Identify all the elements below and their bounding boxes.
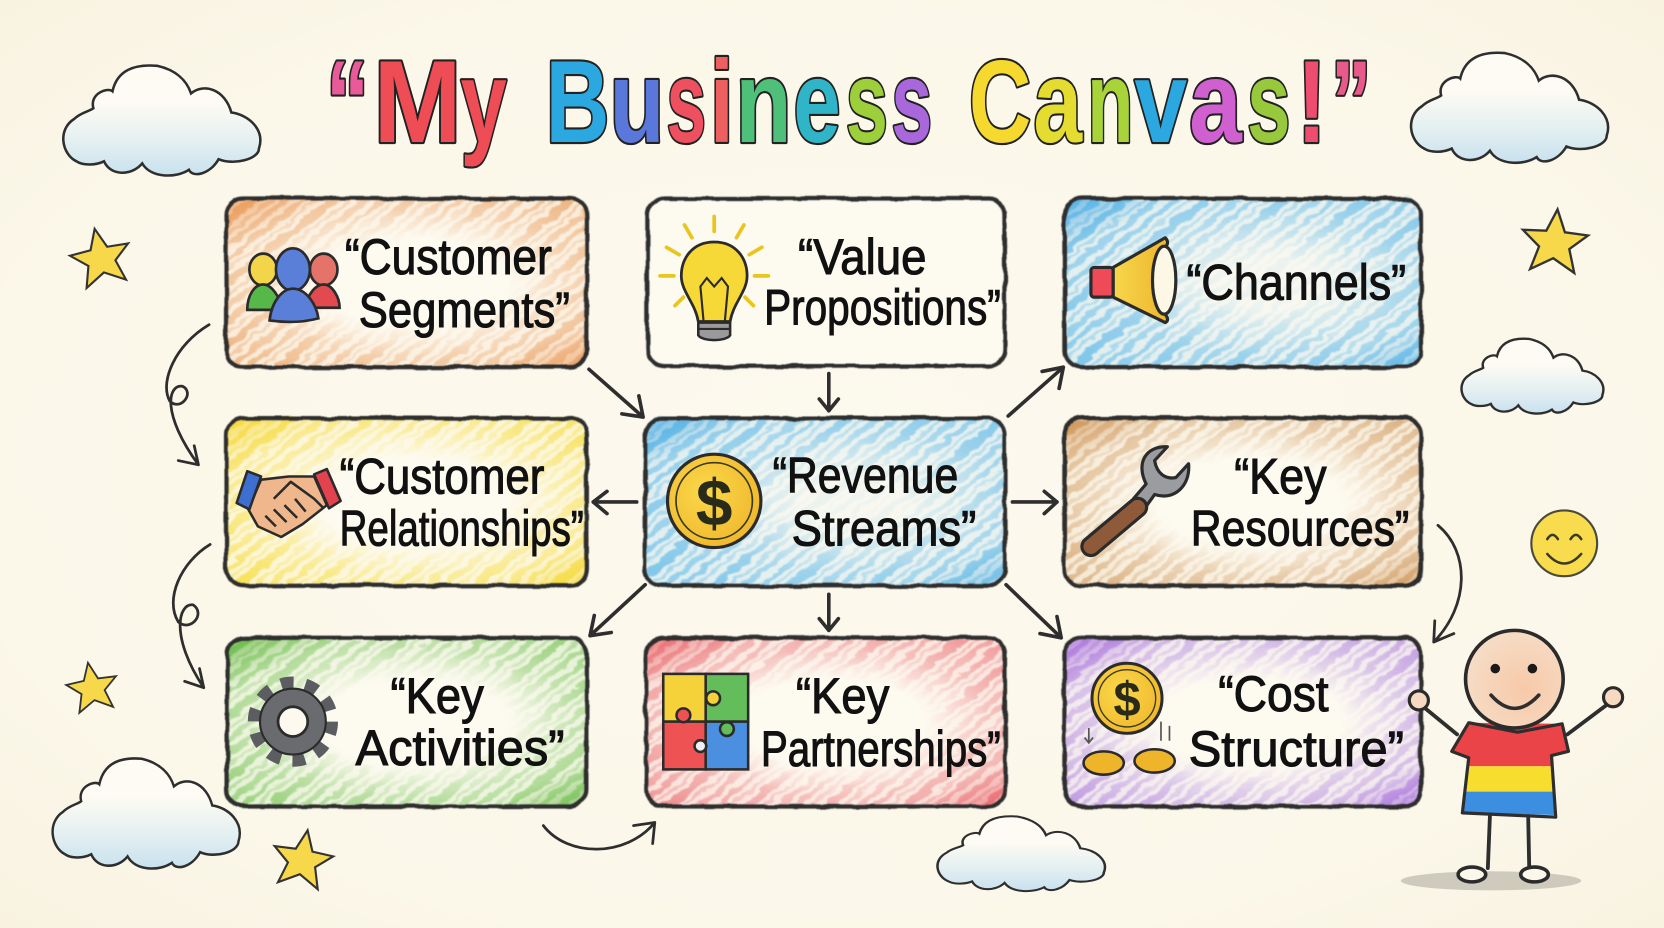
arms <box>1422 706 1606 734</box>
title: a <box>1033 36 1083 167</box>
label <box>340 448 584 556</box>
arrow: segments to revenue <box>589 369 643 417</box>
label: Segments” <box>359 282 570 338</box>
label: Relationships” <box>340 500 584 556</box>
legs <box>1488 815 1529 868</box>
title: “ <box>326 36 369 167</box>
arrow: curved left lower <box>173 544 210 688</box>
cloud bottom left <box>53 758 240 869</box>
title: v <box>1134 36 1187 167</box>
icon: handshake <box>237 469 341 537</box>
star bottom left <box>269 825 337 891</box>
label: “Key <box>796 668 889 724</box>
cloud right <box>1461 339 1603 414</box>
label: Resources” <box>1191 500 1409 556</box>
title: s <box>846 36 888 167</box>
icon: puzzle <box>663 674 748 769</box>
arrow: revenue to cost <box>1006 585 1061 638</box>
icon: light bulb <box>660 216 768 340</box>
panel: key partnerships <box>646 638 1005 807</box>
title: e <box>793 36 841 167</box>
panel: cost structure <box>1064 638 1421 807</box>
ground shadow <box>1401 871 1581 890</box>
title: s <box>891 36 932 167</box>
icon: gear <box>254 682 332 761</box>
title: n <box>735 36 792 167</box>
icon: wrench <box>1091 447 1189 547</box>
label: “Customer <box>345 229 552 285</box>
arrow: revenue to resources <box>1012 491 1057 514</box>
icon: megaphone <box>1091 238 1176 323</box>
panel: revenue streams <box>645 418 1005 586</box>
title: ” <box>1331 36 1372 167</box>
title: y <box>461 36 507 167</box>
title: M <box>374 36 462 167</box>
label <box>773 447 976 556</box>
label <box>1189 666 1404 777</box>
star left <box>63 658 121 714</box>
icon: dollar coin: $ <box>696 465 733 539</box>
label: Activities” <box>356 720 565 776</box>
icon: coins <box>1084 663 1175 775</box>
panel: key activities <box>227 638 587 807</box>
smiley <box>1531 510 1597 576</box>
title: a <box>1189 36 1243 167</box>
label <box>761 668 1001 777</box>
label: “Customer <box>340 448 544 504</box>
panel: customer segments <box>226 198 587 367</box>
title: C <box>969 36 1031 167</box>
arrow: revenue to relationships <box>593 491 637 514</box>
arrow: curved bottom <box>543 822 655 849</box>
arrow: revenue to partnerships <box>819 594 838 630</box>
title: i <box>710 36 734 167</box>
panel: customer relationships <box>226 418 587 586</box>
title: u <box>610 36 665 167</box>
label: “Channels” <box>1186 254 1406 310</box>
arrow: curved right <box>1434 525 1461 642</box>
cloud top left <box>63 65 260 176</box>
panel: value propositions <box>647 198 1005 366</box>
label: “Key <box>391 668 484 724</box>
icon: people <box>247 248 340 322</box>
label <box>345 229 570 338</box>
title: ! <box>1297 36 1327 167</box>
arrow: revenue to channels <box>1008 367 1063 416</box>
arrow: revenue to activities <box>590 585 645 636</box>
shirt <box>1452 723 1568 766</box>
cloud bottom centre <box>937 816 1105 891</box>
panel: channels <box>1064 198 1421 367</box>
label <box>356 668 565 776</box>
label <box>764 229 1001 336</box>
icon: coins: $ <box>1113 673 1141 727</box>
stick figure <box>1401 630 1623 890</box>
head <box>1466 630 1563 728</box>
label: “Value <box>798 229 926 285</box>
cloud top right <box>1411 53 1608 163</box>
panel: key resources <box>1064 418 1421 586</box>
title: s <box>1247 36 1290 167</box>
label: Streams” <box>792 500 976 556</box>
star top left <box>66 223 135 290</box>
star top right <box>1520 207 1590 274</box>
title <box>326 36 1372 167</box>
label: “Revenue <box>773 447 958 503</box>
label: Propositions” <box>764 280 1001 336</box>
icon: dollar coin <box>668 454 761 548</box>
label: Structure” <box>1189 721 1404 777</box>
title: n <box>1087 36 1133 167</box>
arrow: value to revenue <box>819 374 838 411</box>
label: Partnerships” <box>761 721 1001 777</box>
title: s <box>666 36 706 167</box>
label <box>1191 448 1409 556</box>
arrow: curved left upper <box>167 325 209 465</box>
title: B <box>545 36 610 167</box>
label: “Cost <box>1218 666 1329 722</box>
label: “Key <box>1234 448 1327 504</box>
